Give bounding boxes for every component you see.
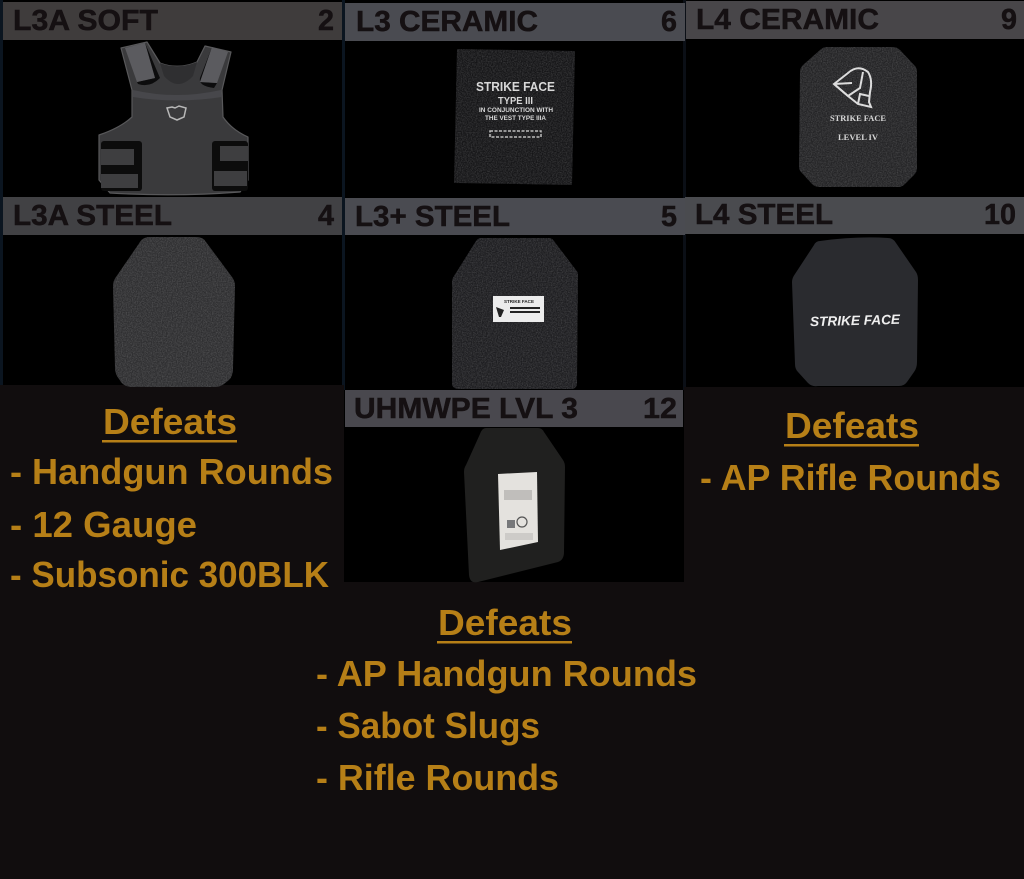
text block: defeats list right: Defeats [785,405,919,446]
text block: defeats list middle: - Rifle Rounds [316,757,559,798]
header: L3A Soft [3,2,342,40]
panel: L3A Soft [3,2,342,195]
header: L3A Soft: L3A SOFT [13,5,158,37]
panel: L3A Steel [3,197,342,387]
icon: ceramic plate pouch: THE VEST TYPE IIIA [485,115,546,122]
header: UHMWPE Level 3 [345,390,683,427]
text block: defeats list middle: Defeats [438,602,572,643]
header: L3+ Steel [345,198,685,235]
panel: L3 Ceramic [345,3,685,185]
header: L3A Steel [3,197,342,235]
header: L4 Ceramic [686,1,1024,39]
header: L4 Ceramic: L4 CERAMIC [696,4,879,36]
text block: defeats list middle [316,602,697,798]
header: L4 Steel: L4 STEEL [695,199,833,231]
icon: steel plate [792,237,918,386]
icon: helmet logo [834,68,871,107]
icon: ceramic plate pouch: IN CONJUNCTION WITH [479,107,553,114]
header: L3+ Steel: 5 [661,201,677,233]
icon: UHMWPE plate [464,428,565,582]
header: UHMWPE Level 3: 12 [643,393,677,425]
label sticker [493,296,544,322]
header: L3A Steel: 4 [318,200,334,232]
panel: L3+ Steel [345,198,685,389]
header: UHMWPE Level 3: UHMWPE LVL 3 [354,393,578,425]
label sticker [498,472,538,550]
header: L3A Soft: 2 [318,5,334,37]
icon: steel plate with label [452,238,578,389]
text block: defeats list left [10,401,333,595]
icon: ceramic plate pouch: TYPE III [498,96,533,107]
text block: defeats list right: - AP Rifle Rounds [700,457,1001,498]
text block: defeats list left: Defeats [103,401,237,442]
icon: steel plate [113,237,235,387]
header: L3+ Steel: L3+ STEEL [355,201,510,233]
header: L3 Ceramic: L3 CERAMIC [356,6,538,38]
header: L3 Ceramic [345,3,685,41]
background panel: defeats area [0,385,1024,879]
panel: L4 Ceramic [686,1,1024,187]
panel: L4 Steel [685,197,1024,386]
icon: ceramic plate: LEVEL IV [838,132,879,142]
panel: UHMWPE Level 3 [345,390,683,582]
label sticker: STRIKE FACE [504,299,534,304]
icon: ceramic plate: STRIKE FACE [830,113,886,123]
text block: defeats list right [700,405,1001,498]
icon: soft armor vest [99,42,248,195]
icon: steel plate: STRIKE FACE [810,312,901,329]
icon: ceramic plate [799,47,917,187]
text block: defeats list left: - 12 Gauge [10,504,197,545]
text block: defeats list middle: - Sabot Slugs [316,705,540,746]
header: L4 Steel: 10 [984,199,1016,231]
header: L4 Ceramic: 9 [1001,4,1017,36]
text block: defeats list left: - Subsonic 300BLK [10,554,329,595]
header: L3 Ceramic: 6 [661,6,677,38]
text block: defeats list middle: - AP Handgun Rounds [316,653,697,694]
text block: defeats list left: - Handgun Rounds [10,451,333,492]
header: L4 Steel [685,197,1024,234]
icon: ceramic plate pouch: STRIKE FACE [476,79,555,94]
header: L3A Steel: L3A STEEL [13,200,172,232]
icon: ceramic plate pouch [454,49,575,185]
